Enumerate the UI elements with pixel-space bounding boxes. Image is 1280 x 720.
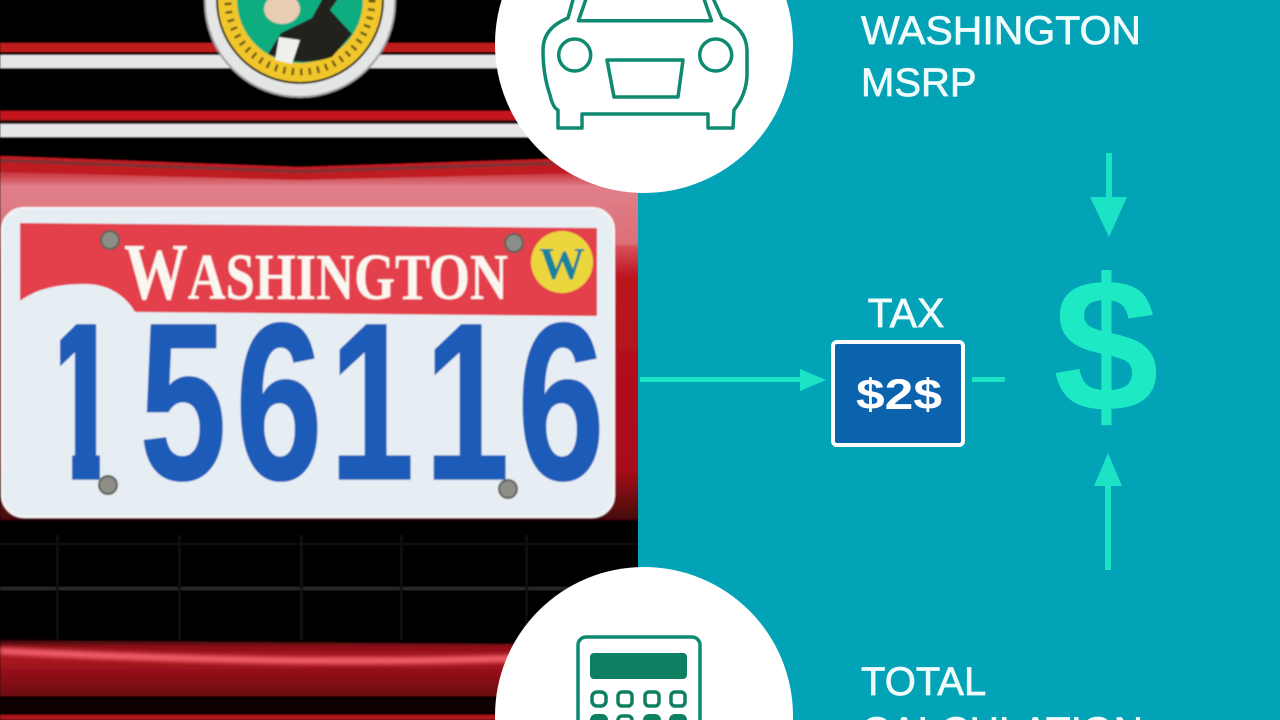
tax amount box: $2$ [856, 371, 942, 419]
arrow: down to dollar [1090, 153, 1127, 237]
heading: total calculation: TOTAL [861, 660, 986, 704]
lower bumper [0, 640, 640, 720]
plate number: 1 [425, 277, 509, 527]
heading: Washington MSRP [861, 9, 1141, 105]
plate screws [99, 231, 523, 498]
heading: Washington MSRP: WASHINGTON [861, 9, 1141, 53]
plate sticker: W [539, 238, 585, 289]
circle badge: calculator icon [495, 567, 793, 720]
licence plate [2, 208, 614, 527]
arrow: up to dollar [1094, 453, 1122, 570]
heading: total calculation [861, 660, 1143, 720]
plate number: 6 [517, 276, 605, 527]
plate surround [0, 245, 640, 645]
plate number [59, 321, 600, 483]
big dollar sign: $ [1053, 240, 1159, 452]
photo panel: red car grille with Washington licence plate [0, 0, 640, 720]
dash: out of tax box [972, 377, 1005, 382]
label: tax: TAX [868, 290, 944, 336]
plate red banner [20, 223, 597, 316]
teal information panel [638, 0, 1280, 720]
plate number: 6 [235, 276, 323, 527]
plate sticker [531, 231, 593, 293]
tax amount box [833, 342, 963, 445]
plate state name: WASHINGTON [124, 229, 508, 317]
heading: Washington MSRP: MSRP [861, 61, 977, 105]
plate number: 1 [41, 277, 123, 527]
plate number: 5 [139, 276, 227, 527]
state seal emblem [205, 0, 395, 97]
circle badge: car icon [495, 0, 793, 193]
arrow: into tax box [640, 369, 826, 391]
plate number: 1 [330, 277, 414, 527]
upper grille bars [0, 43, 640, 255]
